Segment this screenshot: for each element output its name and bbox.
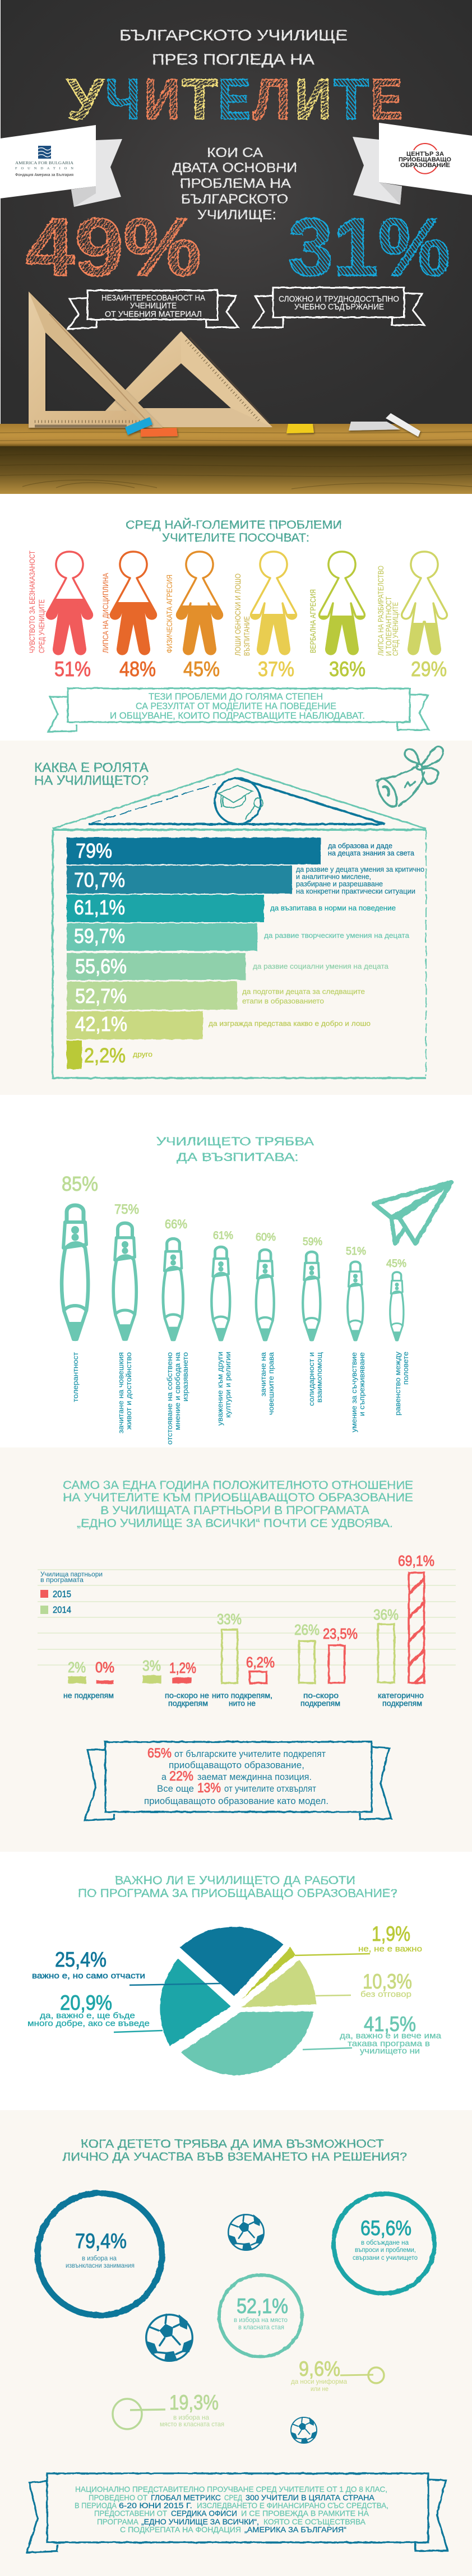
ribbon: methodology note: КОЯТО СЕ ОСЪЩЕСТВЯВА	[263, 2517, 366, 2526]
pencil percentages: 85%	[62, 1172, 98, 1195]
heading	[126, 518, 342, 544]
bubble: 9,6%: да носи униформа	[291, 2378, 347, 2385]
heading: СРЕД НАЙ-ГОЛЕМИТЕ ПРОБЛЕМИ	[126, 518, 342, 531]
title: УЧИТЕЛИТЕ chalk letters: Т	[182, 67, 218, 131]
percent labels: 36%	[329, 658, 365, 681]
pencil chart	[62, 1205, 404, 1342]
left flag with America for Bulgaria logo	[0, 125, 122, 207]
left flag with America for Bulgaria logo: AMERICA FOR BULGARIA	[15, 160, 74, 165]
bar values: 6,2%	[246, 1654, 275, 1671]
bar values: 70,7%	[74, 868, 125, 891]
legend: Училища партньори	[40, 1571, 103, 1578]
vertical labels for people: ЛИПСА НА ДИСЦИПЛИНА	[101, 572, 110, 653]
vertical labels for people	[27, 551, 400, 656]
legend	[40, 1571, 103, 1615]
stat: 31% chalk: 31%	[288, 201, 450, 293]
ribbon: methodology note: ГЛОБАЛ МЕТРИКС	[151, 2493, 221, 2502]
bar chart: 2014 vs 2015	[38, 1552, 456, 1708]
bar labels: и аналитично мислене,	[296, 872, 371, 881]
ribbon: methodology note: 6-20 ЮНИ 2015 Г.	[119, 2501, 192, 2510]
ribbon: methodology note: „ЕДНО УЧИЛИЩЕ ЗА ВСИЧКИ“,	[141, 2517, 259, 2526]
bar labels: да изгражда представа какво е добро и лошо	[209, 1019, 371, 1028]
bubble: 79,4%: в избора на	[82, 2254, 117, 2262]
ribbon: 65 / 22 / 13 percent callout: 65%	[147, 1746, 172, 1761]
ribbon: difficult content	[253, 288, 424, 327]
ribbon: behaviour models: И ОБЩУВАНЕ, КОИТО ПОДРАСТВАЩИТЕ НАБЛЮДАВАТ.	[110, 710, 365, 721]
heading: КАКВА Е РОЛЯТА	[34, 760, 149, 775]
pie labels: 10,3%	[363, 1970, 412, 1993]
heading	[78, 1874, 397, 1900]
axis labels: по-скоро	[303, 1691, 339, 1700]
heading: „ЕДНО УЧИЛИЩЕ ЗА ВСИЧКИ“ ПОЧТИ СЕ УДВОЯВА.	[77, 1517, 393, 1530]
icon: football medium	[228, 2214, 264, 2250]
heading: УЧИЛИЩЕТО ТРЯБВА	[156, 1135, 314, 1148]
pencil labels: уважение към други	[216, 1352, 224, 1426]
icon: chalk pieces	[125, 413, 420, 437]
blackboard background	[1, 0, 472, 424]
title: УЧИТЕЛИТЕ chalk letters	[67, 67, 402, 131]
heading: В УЧИЛИЩАТА ПАРТНЬОРИ В ПРОГРАМАТА	[100, 1504, 369, 1517]
panel: school must educate	[62, 1135, 451, 1445]
person figure 29%	[402, 552, 447, 654]
question text: БЪЛГАРСКОТО	[181, 192, 288, 207]
pie labels: 41,5%	[364, 2013, 416, 2036]
vertical labels for people: ВЕРБАЛНА АГРЕСИЯ	[308, 589, 317, 653]
ribbon: lack of interest: ОТ УЧЕБНИЯ МАТЕРИАЛ	[105, 309, 202, 319]
percent labels: 29%	[411, 658, 447, 681]
pencil labels: половете	[401, 1352, 410, 1385]
cream background	[0, 1447, 472, 1852]
vertical labels for people: ЧУВСТВОТО ЗА БЕЗНАКАЗАНОСТ	[27, 551, 36, 653]
ribbon: 65 / 22 / 13 percent callout: приобщаващото образование,	[169, 1760, 304, 1770]
bar values: 42,1%	[75, 1012, 127, 1035]
ribbon: methodology note: С ПОДКРЕПАТА НА ФОНДАЦИЯ	[120, 2525, 241, 2534]
bubble: 9,6%: 9,6%	[299, 2357, 340, 2380]
pencil labels: взаимопомощ	[315, 1352, 323, 1403]
ribbon: 65 / 22 / 13 percent callout: от българските учителите подкрепят	[174, 1749, 326, 1759]
title: УЧИТЕЛИТЕ chalk letters: У	[67, 67, 105, 131]
panel: blackboard header	[0, 0, 472, 494]
pencil percentages: 61%	[213, 1230, 233, 1242]
title: УЧИТЕЛИТЕ chalk letters: Е	[218, 67, 251, 131]
ribbon: behaviour models: ТЕЗИ ПРОБЛЕМИ ДО ГОЛЯМА СТЕПЕН	[149, 691, 323, 702]
bar values: 61,1%	[74, 896, 125, 919]
icon: football large	[146, 2315, 192, 2361]
ribbon: methodology note: ПРЕДОСТАВЕНИ ОТ	[94, 2509, 167, 2518]
ribbon: methodology note: 300 УЧИТЕЛИ В ЦЯЛАТА СТРАНА	[246, 2493, 375, 2502]
pencil percentages: 45%	[386, 1258, 406, 1270]
bar values: 26%	[294, 1621, 320, 1638]
pencil percentages: 60%	[256, 1232, 276, 1243]
bar labels: да възпитава в норми на поведение	[270, 904, 396, 912]
bar labels: да образова и даде	[328, 841, 392, 850]
axis labels: подкрепям	[382, 1699, 422, 1708]
bars	[67, 838, 321, 1069]
ribbon: behaviour models	[48, 688, 429, 732]
left flag with America for Bulgaria logo: F O U N D A T I O N	[15, 167, 73, 170]
ribbon: methodology note: ПРОВЕДЕНО ОТ	[89, 2493, 147, 2502]
pie labels	[27, 1922, 442, 2056]
pencil labels: отстояване на собствено	[165, 1352, 174, 1445]
axis labels: нито не	[229, 1699, 256, 1708]
ribbon: 65 / 22 / 13 percent callout: Все още	[157, 1783, 194, 1794]
right flag with Center for Inclusive Education logo: ЦЕНТЪР ЗА	[406, 151, 444, 158]
pencil labels: изразяването	[181, 1352, 189, 1402]
title: first two lines: БЪЛГАРСКОТО УЧИЛИЩЕ	[119, 27, 348, 44]
ribbon: methodology note: НАЦИОНАЛНО ПРЕДСТАВИТЕЛНО ПРОУЧВАНЕ СРЕД УЧИТЕЛИТЕ ОТ 1 ДО 8 КЛАС,	[75, 2485, 387, 2494]
percent labels	[54, 658, 447, 681]
percent labels: 48%	[119, 658, 156, 681]
person figure 45%	[177, 552, 222, 654]
person figure 51%	[47, 552, 92, 654]
bar values	[68, 1552, 434, 1676]
bubble: 65,6%: свързани с училището	[353, 2254, 418, 2261]
pencil labels: мнение и свобода на	[173, 1352, 182, 1430]
ribbon: 65 / 22 / 13 percent callout: приобщаващото образование като модел.	[144, 1796, 328, 1806]
ribbon: 65 / 22 / 13 percent callout	[85, 1742, 391, 1820]
bar values: 55,6%	[75, 955, 127, 978]
ribbon: lack of interest: НЕЗАИНТЕРЕСОВАНОСТ НА	[101, 293, 205, 303]
icon: paper plane	[374, 1182, 451, 1243]
title: УЧИТЕЛИТЕ chalk letters: Л	[253, 67, 290, 131]
axis labels: по-скоро не	[165, 1691, 209, 1700]
axis labels: нито подкрепям,	[212, 1691, 272, 1700]
heading: КОГА ДЕТЕТО ТРЯБВА ДА ИМА ВЪЗМОЖНОСТ	[81, 2138, 384, 2150]
title: УЧИТЕЛИТЕ chalk letters: И	[295, 67, 331, 131]
wooden shelf	[0, 424, 472, 494]
right flag with Center for Inclusive Education logo	[353, 123, 472, 205]
bubble: 52,1%: в избора на място	[234, 2316, 288, 2324]
title: УЧИТЕЛИТЕ chalk letters: Т	[334, 67, 369, 131]
bar labels: да развие социални умения на децата	[253, 962, 389, 970]
heading	[34, 760, 149, 788]
pencil labels: солидарност и	[307, 1352, 316, 1406]
pencil percentages: 59%	[303, 1236, 322, 1248]
bar labels: друго	[133, 1050, 152, 1058]
heading: САМО ЗА ЕДНА ГОДИНА ПОЛОЖИТЕЛНОТО ОТНОШЕНИЕ	[63, 1479, 413, 1492]
pie labels: да, важно е, ще бъде	[40, 2011, 135, 2020]
bar labels: да подготви децата за следващите	[242, 987, 365, 996]
cream background	[0, 2110, 472, 2576]
person figure 36%	[320, 552, 364, 654]
heading: ЛИЧНО ДА УЧАСТВА ВЪВ ВЗЕМАНЕТО НА РЕШЕНИЯ?	[62, 2150, 407, 2163]
ribbon: methodology note: „АМЕРИКА ЗА БЪЛГАРИЯ“	[244, 2525, 346, 2534]
bubble: 79,4%: 79,4%	[75, 2230, 127, 2253]
pencil percentages	[62, 1172, 406, 1270]
pie labels: много добре, ако се въведе	[27, 2019, 150, 2028]
bar values: 3%	[142, 1657, 161, 1674]
pencil labels: култури и религии	[224, 1352, 232, 1418]
heading	[62, 2138, 407, 2163]
right flag with Center for Inclusive Education logo: ОБРАЗОВАНИЕ	[400, 162, 450, 169]
icon: school bell	[374, 747, 443, 810]
pencil labels: зачитане на човешкия	[117, 1352, 125, 1433]
pencil percentages: 66%	[165, 1217, 187, 1231]
bar values: 59,7%	[74, 924, 125, 947]
axis labels	[63, 1691, 424, 1708]
bar values: 52,7%	[75, 984, 127, 1007]
pencil labels: умение за съчувствие	[350, 1352, 358, 1432]
pie labels: такава програма в	[348, 2039, 430, 2048]
pie labels: 25,4%	[55, 1948, 107, 1971]
bar labels: на конкретни практически ситуации	[296, 887, 415, 895]
bar values: 2%	[68, 1659, 86, 1676]
vertical labels for people: СРЕД УЧЕНИЦИТЕ	[391, 602, 400, 656]
title: УЧИТЕЛИТЕ chalk letters: Ч	[105, 67, 140, 131]
pencil labels: и съпреживяване	[358, 1352, 366, 1416]
pencil percentages: 75%	[114, 1202, 139, 1217]
bar chart: school role	[67, 838, 424, 1069]
pencil labels: живот и достойнство	[124, 1352, 133, 1430]
question text	[172, 145, 297, 223]
pencil labels: равенство между	[394, 1351, 402, 1416]
bar values: 2,2%	[84, 1044, 126, 1067]
title: УЧИТЕЛИТЕ chalk letters: Е	[371, 67, 402, 131]
pie labels: 1,9%	[372, 1922, 410, 1945]
bar labels: да развие у децата умения за критично	[296, 865, 424, 873]
heading: ВАЖНО ЛИ Е УЧИЛИЩЕТО ДА РАБОТИ	[115, 1874, 355, 1887]
pie labels: без отговор	[360, 1990, 411, 1999]
bar values: 79%	[76, 839, 112, 862]
bar labels: да развие творческите умения на децата	[264, 931, 410, 940]
axis labels: категорично	[378, 1691, 424, 1700]
person figure 37%	[251, 552, 296, 654]
legend: 2015	[53, 1589, 71, 1599]
stat: 49% chalk: 49%	[26, 201, 201, 293]
house: roof and walls	[53, 769, 426, 1078]
bubble: 52,1%: в класната стая	[238, 2323, 284, 2331]
cream background	[0, 741, 472, 1095]
heading: ПО ПРОГРАМА ЗА ПРИОБЩАВАЩО ОБРАЗОВАНИЕ?	[78, 1887, 397, 1900]
pie labels: 20,9%	[60, 1991, 112, 2014]
right flag with Center for Inclusive Education logo: ПРИОБЩАВАЩО	[399, 156, 451, 163]
ribbon: 65 / 22 / 13 percent callout: а	[161, 1772, 167, 1782]
question text: УЧИЛИЩЕ:	[197, 207, 276, 223]
ribbon: methodology note: ИЗСЛЕДВАНЕТО Е ФИНАНСИРАНО СЪС СРЕДСТВА,	[197, 2501, 388, 2510]
percent labels: 37%	[258, 658, 294, 681]
ribbon: difficult content: УЧЕБНО СЪДЪРЖАНИЕ	[294, 302, 384, 312]
heading: НА УЧИЛИЩЕТО?	[34, 773, 149, 788]
bubble: 65,6%: въпроси и проблеми,	[355, 2246, 416, 2254]
ribbon: lack of interest	[68, 290, 238, 329]
bubble: 52,1%	[219, 2275, 302, 2357]
bar labels: разбиране и разрешаване	[296, 880, 383, 888]
ribbon: difficult content: СЛОЖНО И ТРУДНОДОСТЪПНО	[279, 294, 399, 304]
icon: football small	[291, 2417, 317, 2443]
axis labels: не подкрепям	[63, 1691, 114, 1700]
title: first two lines: ПРЕЗ ПОГЛЕДА НА	[152, 51, 314, 68]
ribbon: 65 / 22 / 13 percent callout: заемат междинна позиция.	[197, 1772, 312, 1782]
bubble: 65,6%	[334, 2194, 434, 2293]
ribbon: behaviour models: СА РЕЗУЛТАТ ОТ МОДЕЛИТЕ НА ПОВЕДЕНИЕ	[136, 701, 336, 711]
ribbon: methodology note: СРЕД	[224, 2493, 242, 2502]
pie labels: да, важно е и вече има	[340, 2031, 442, 2041]
ribbon: methodology note: И СЕ ПРОВЕЖДА В РАМКИТЕ НА	[241, 2509, 369, 2518]
panel: child participation in decisions	[0, 2110, 472, 2576]
bubble: 65,6%: в обсъждане на	[361, 2239, 409, 2246]
bubble: 79,4%	[38, 2193, 162, 2315]
heading	[63, 1479, 413, 1530]
vertical labels for people: ЛОШИ ОБНОСКИ И ЛОШО	[233, 574, 242, 656]
bar values: 33%	[217, 1611, 242, 1627]
ribbon: methodology note: ПРОГРАМА	[97, 2517, 139, 2526]
ribbon: lack of interest: УЧЕНИЦИТЕ	[130, 301, 177, 311]
percent labels: 45%	[183, 658, 220, 681]
vertical labels for people: СРЕД УЧЕНИЦИТЕ	[37, 599, 46, 653]
pencil labels: човешките права	[267, 1352, 275, 1415]
pencil labels	[71, 1351, 410, 1445]
bar values: 36%	[373, 1606, 399, 1623]
panel: biggest problems	[27, 518, 447, 732]
bubble: 19,3%: 19,3%	[169, 2391, 219, 2414]
bar values: 23,5%	[323, 1625, 358, 1642]
question text: ПРОБЛЕМА НА	[180, 176, 291, 191]
ribbon: 65 / 22 / 13 percent callout: от учителите отхвърлят	[224, 1783, 316, 1794]
pencil labels: зачитане на	[259, 1352, 267, 1396]
vertical labels for people: ВЪЗПИТАНИЕ	[242, 616, 251, 656]
vertical labels for people: ЛИПСА НА РАЗБИРАТЕЛСТВО	[376, 566, 385, 656]
bar labels: на децата знания за света	[328, 849, 415, 857]
heading: УЧИТЕЛИТЕ ПОСОЧВАТ:	[162, 531, 309, 544]
person figure 48%	[111, 552, 156, 654]
pencil labels: толерантност	[71, 1352, 80, 1402]
bubble: 79,4%: извънкласни занимания	[66, 2261, 135, 2269]
heading: НА УЧИТЕЛИТЕ КЪМ ПРИОБЩАВАЩОТО ОБРАЗОВАНИЕ	[63, 1491, 413, 1504]
panel: attitude to inclusive education	[0, 1447, 472, 1852]
bars	[69, 1573, 424, 1683]
heading	[156, 1135, 314, 1164]
bubble: 9,6%	[291, 2357, 384, 2393]
bar values: 1,2%	[169, 1659, 196, 1676]
axis labels: подкрепям	[300, 1699, 340, 1708]
bar values	[74, 839, 127, 1067]
heading: ДА ВЪЗПИТАВА:	[177, 1151, 299, 1164]
bubble: 52,1%: 52,1%	[237, 2295, 288, 2318]
percent labels: 51%	[54, 658, 91, 681]
panel: role of the school	[0, 741, 472, 1095]
axis labels: подкрепям	[168, 1699, 208, 1708]
ribbon: methodology note: СЕРДИКА ОФИСИ	[171, 2509, 237, 2518]
pie labels: училището ни	[360, 2046, 420, 2056]
bar values: 69,1%	[398, 1552, 434, 1569]
pie labels: важно е, но само отчасти	[32, 1971, 145, 1981]
bubble: 65,6%: 65,6%	[360, 2217, 411, 2240]
legend: 2014	[53, 1604, 71, 1615]
bubble: 19,3%	[113, 2391, 224, 2429]
bubble: 9,6%: или не	[311, 2385, 328, 2393]
pie chart	[160, 1927, 316, 2075]
ribbon: 65 / 22 / 13 percent callout: 22%	[169, 1769, 193, 1784]
icon: wooden set squares	[29, 292, 272, 428]
ribbon: methodology note	[27, 2473, 448, 2552]
panel: importance of the program	[27, 1874, 442, 2075]
house: pediment triangle with emblem	[89, 778, 385, 824]
bar values: 0%	[95, 1659, 114, 1676]
bar labels: етапи в образованието	[242, 997, 324, 1005]
bar labels	[133, 841, 424, 1058]
bubble: 19,3%: място в класната стая	[160, 2420, 224, 2428]
pie labels: не, не е важно	[358, 1944, 422, 1954]
title: УЧИТЕЛИТЕ chalk letters: И	[144, 67, 180, 131]
vertical labels for people: ФИЗИЧЕСКАТА АГРЕСИЯ	[165, 575, 174, 653]
bubble: 19,3%: в избора на	[173, 2413, 209, 2421]
legend: в програмата	[40, 1577, 84, 1584]
leader lines	[114, 1954, 370, 2050]
ribbon: 65 / 22 / 13 percent callout: 13%	[197, 1780, 221, 1796]
vertical labels for people: И ТОЛЕРАНТНОСТ	[384, 596, 393, 656]
question text: КОИ СА	[207, 145, 263, 160]
left flag with America for Bulgaria logo: Фондация Америка за България	[15, 173, 73, 177]
pencil percentages: 51%	[346, 1246, 366, 1257]
title: first two lines	[119, 27, 348, 68]
ribbon: methodology note: В ПЕРИОДА	[75, 2501, 117, 2510]
question text: ДВАТА ОСНОВНИ	[172, 160, 297, 175]
